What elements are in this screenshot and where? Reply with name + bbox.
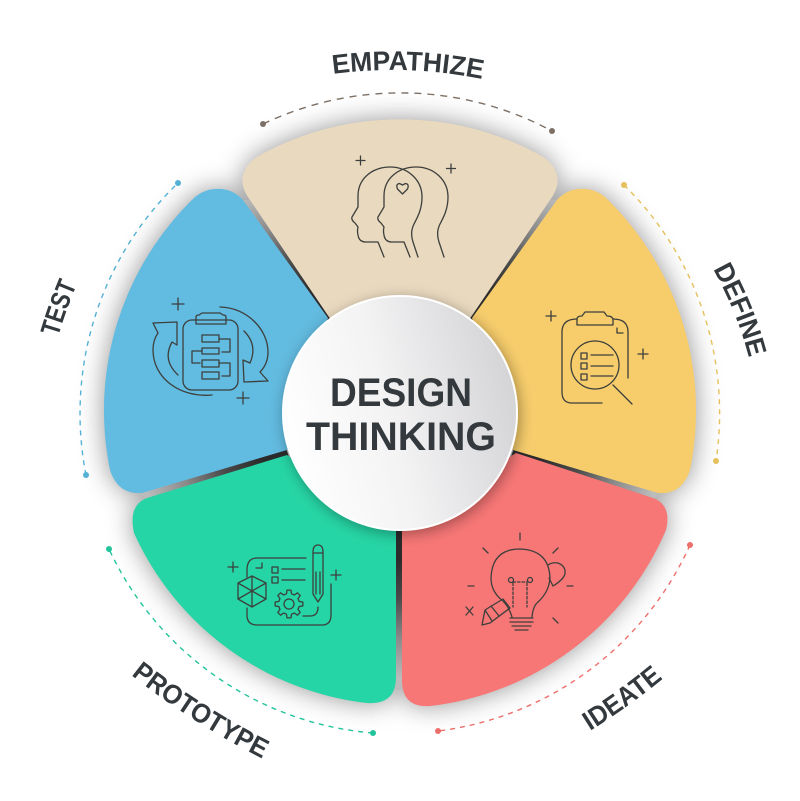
icon: heads with heart [352, 156, 456, 257]
center title: DESIGN [330, 371, 472, 415]
label: ideate: IDEATE [582, 665, 662, 730]
center title: THINKING [306, 415, 496, 459]
petal: define [472, 189, 696, 493]
center circle [283, 296, 517, 530]
icon: clipboard with cycle arrows [153, 298, 268, 404]
arc: prototype [106, 546, 376, 736]
soft shadow under the wheel [104, 119, 696, 706]
icon: clipboard with magnifier [546, 311, 648, 404]
label: define: DEFINE [714, 262, 766, 357]
petal: prototype [133, 455, 396, 703]
icon: light bulb with pencil [466, 533, 573, 630]
arc: ideate [435, 542, 693, 734]
arc: empathize [260, 93, 555, 134]
arc: define [621, 182, 720, 464]
label: empathize: EMPATHIZE [332, 51, 484, 79]
label: prototype: PROTOTYPE [132, 661, 270, 758]
petal: empathize [242, 119, 558, 320]
arc: test [80, 180, 181, 478]
petal: test [104, 189, 328, 493]
petal: ideate [402, 453, 667, 706]
dark gaps between petals [140, 200, 660, 690]
icon: prototype blueprint [228, 545, 341, 625]
label: test: TEST [40, 278, 75, 332]
